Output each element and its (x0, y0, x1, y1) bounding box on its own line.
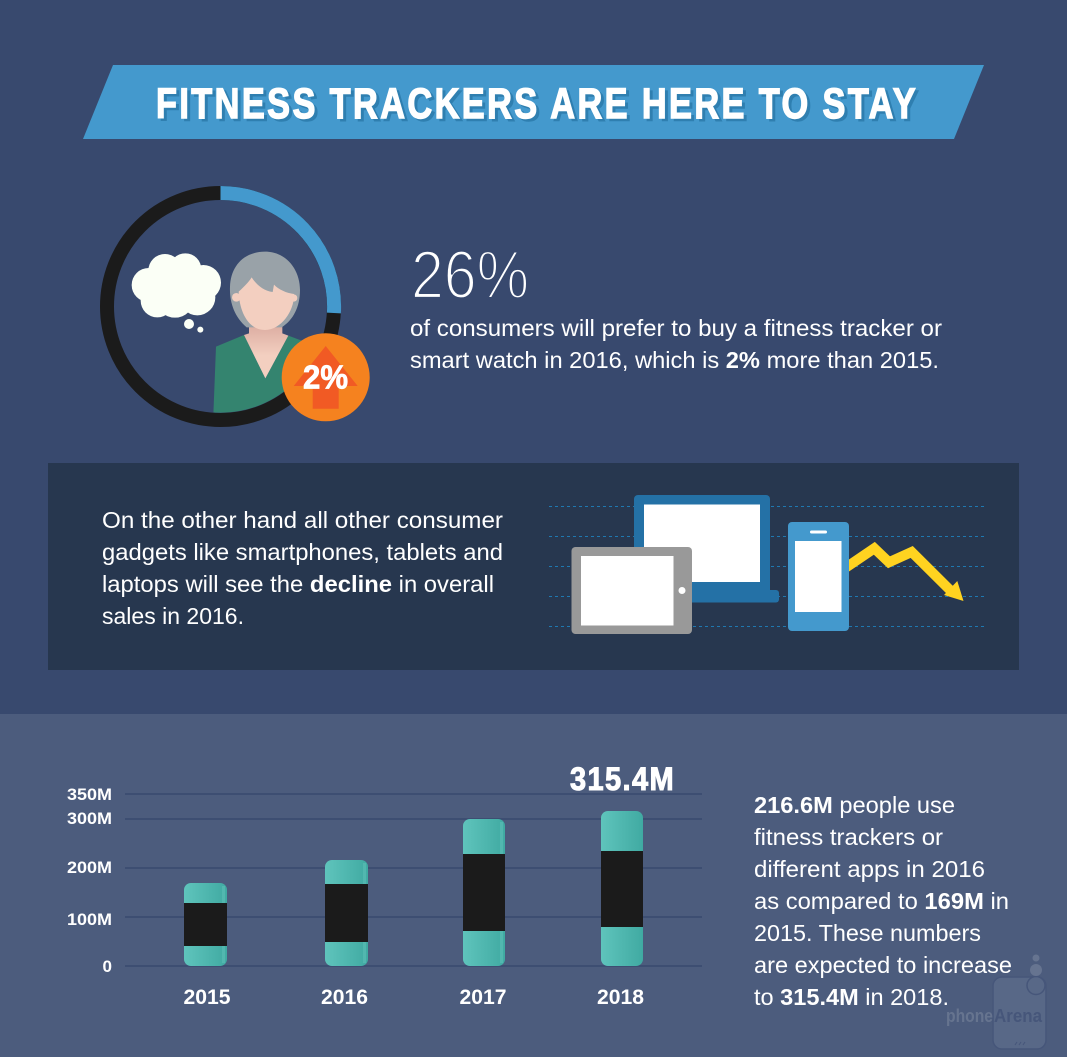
badge: 2% up arrow (282, 333, 370, 421)
progress ring (107, 193, 334, 420)
y axis labels (67, 785, 112, 976)
big stat: 26%: 26% (411, 237, 529, 313)
title banner (83, 65, 984, 139)
usage description: different apps in 2016 (754, 856, 985, 882)
usage description: 216.6M people use (754, 792, 955, 818)
stat description (410, 315, 942, 373)
icon: woman with thought bubble (132, 252, 313, 423)
panel text: On the other hand all other consumer (102, 507, 503, 533)
stat description: of consumers will prefer to buy a fitness tracker or (410, 315, 942, 341)
x axis labels (184, 986, 644, 1009)
icon: declining arrow (846, 548, 964, 601)
bar 2017 (463, 819, 505, 966)
bar 2018 (601, 811, 643, 966)
usage description: fitness trackers or (754, 824, 943, 850)
thought bubble (132, 253, 221, 333)
icon: laptop (634, 495, 779, 602)
y axis labels: 0 (103, 957, 112, 976)
x axis labels: 2017 (460, 986, 506, 1009)
usage description (754, 792, 1012, 1010)
usage description: 2015. These numbers (754, 920, 981, 946)
watermark: phoneArena: Arena (994, 1006, 1043, 1026)
panel: decline in gadgets (48, 463, 1019, 670)
y axis labels: 100M (67, 910, 112, 929)
usage description: as compared to 169M in (754, 888, 1009, 914)
panel text: sales in 2016. (102, 603, 244, 629)
y axis labels: 200M (67, 858, 112, 877)
grid lines (125, 794, 702, 966)
y axis labels: 300M (67, 809, 112, 828)
icon: tablet (572, 547, 692, 634)
panel: usage chart section (0, 714, 1067, 1057)
x axis labels: 2016 (321, 986, 368, 1009)
watermark: phoneArena (946, 954, 1046, 1049)
bar 2015 (184, 883, 227, 966)
woman figure (214, 252, 302, 413)
usage description: are expected to increase (754, 952, 1012, 978)
y axis labels: 350M (67, 785, 112, 804)
x axis labels: 2015 (184, 986, 231, 1009)
panel text: gadgets like smartphones, tablets and (102, 539, 503, 565)
watermark: phoneArena: phone (946, 1006, 993, 1026)
panel text: laptops will see the decline in overall (102, 571, 494, 597)
x axis labels: 2018 (597, 986, 644, 1009)
value callout: 315.4M (570, 761, 675, 797)
stat description: smart watch in 2016, which is 2% more than 2015. (410, 347, 939, 373)
usage description: to 315.4M in 2018. (754, 984, 949, 1010)
panel text (102, 507, 503, 629)
dashed grid (549, 506, 984, 626)
bar chart (67, 761, 702, 1009)
bar 2016 (325, 860, 368, 966)
icon: smartphone (788, 522, 849, 631)
badge: 2% up arrow: 2% (303, 358, 348, 396)
